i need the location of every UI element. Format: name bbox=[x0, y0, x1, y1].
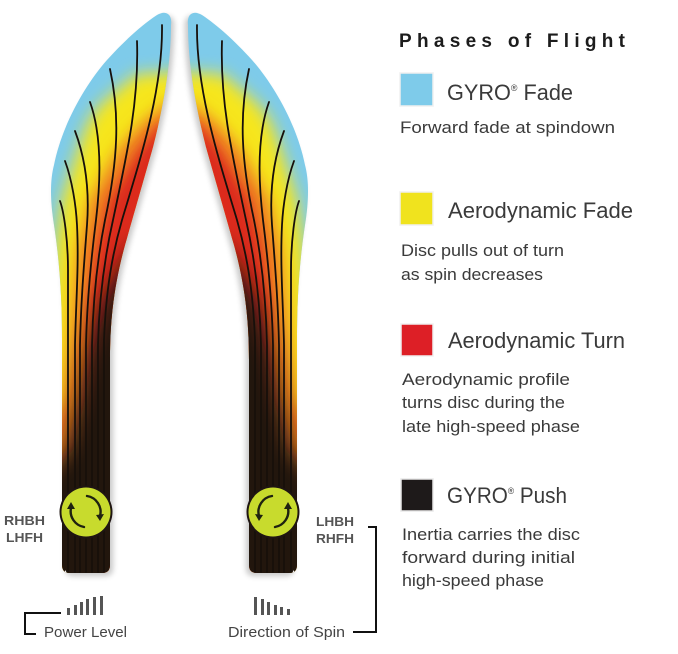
label: LHBH RHFH bbox=[316, 514, 354, 546]
legend: aerodynamic turn bbox=[401, 324, 625, 436]
heading: aerodynamic fade: Aerodynamic Fade bbox=[448, 198, 633, 223]
direction of spin bracket bbox=[353, 527, 376, 632]
heading: gyro fade: ® bbox=[511, 83, 518, 93]
icon: power level bars bbox=[67, 596, 103, 615]
description: aerodynamic turn: late high-speed phase bbox=[402, 417, 580, 436]
description: gyro push: forward during initial bbox=[402, 548, 575, 567]
label: LHBH RHFH: LHBH bbox=[316, 514, 354, 529]
heading: aerodynamic turn: Aerodynamic Turn bbox=[448, 328, 625, 353]
description: aerodynamic turn bbox=[402, 370, 580, 436]
label: LHBH RHFH: RHFH bbox=[316, 531, 354, 546]
heading: gyro push: GYRO bbox=[447, 483, 512, 508]
heading: gyro push: Push bbox=[514, 483, 567, 508]
description: gyro push: Inertia carries the disc bbox=[402, 525, 581, 544]
description: aerodynamic fade bbox=[401, 241, 564, 284]
swatch: yellow bbox=[400, 192, 433, 225]
description: aerodynamic fade: as spin decreases bbox=[401, 265, 543, 284]
swatch: black bbox=[401, 479, 433, 511]
power level bracket bbox=[25, 613, 61, 634]
power level label: Power Level bbox=[44, 624, 127, 641]
left flight path wing bbox=[30, 0, 190, 620]
description: gyro fade: Forward fade at spindown bbox=[400, 118, 615, 137]
description: aerodynamic turn: turns disc during the bbox=[402, 393, 565, 412]
swatch: blue bbox=[400, 73, 433, 106]
label: RHBH LHFH bbox=[4, 513, 45, 545]
description: gyro push bbox=[402, 525, 581, 590]
heading: gyro fade: GYRO bbox=[447, 80, 512, 105]
label: RHBH LHFH: LHFH bbox=[6, 530, 43, 545]
label: RHBH LHFH: RHBH bbox=[4, 513, 45, 528]
swatch: red bbox=[401, 324, 433, 356]
description: aerodynamic turn: Aerodynamic profile bbox=[402, 370, 570, 389]
heading: gyro push: ® bbox=[508, 486, 514, 496]
icon: direction of spin bars bbox=[254, 597, 290, 615]
description: aerodynamic fade: Disc pulls out of turn bbox=[401, 241, 564, 260]
legend: aerodynamic fade bbox=[400, 192, 633, 284]
description: gyro push: high-speed phase bbox=[402, 571, 544, 590]
legend: gyro push bbox=[401, 479, 581, 590]
right flight path wing bbox=[169, 0, 329, 620]
title: Phases of Flight bbox=[399, 31, 626, 52]
legend: gyro fade bbox=[400, 73, 615, 137]
direction of spin label: Direction of Spin bbox=[228, 624, 345, 641]
heading: gyro fade: Fade bbox=[517, 80, 573, 105]
